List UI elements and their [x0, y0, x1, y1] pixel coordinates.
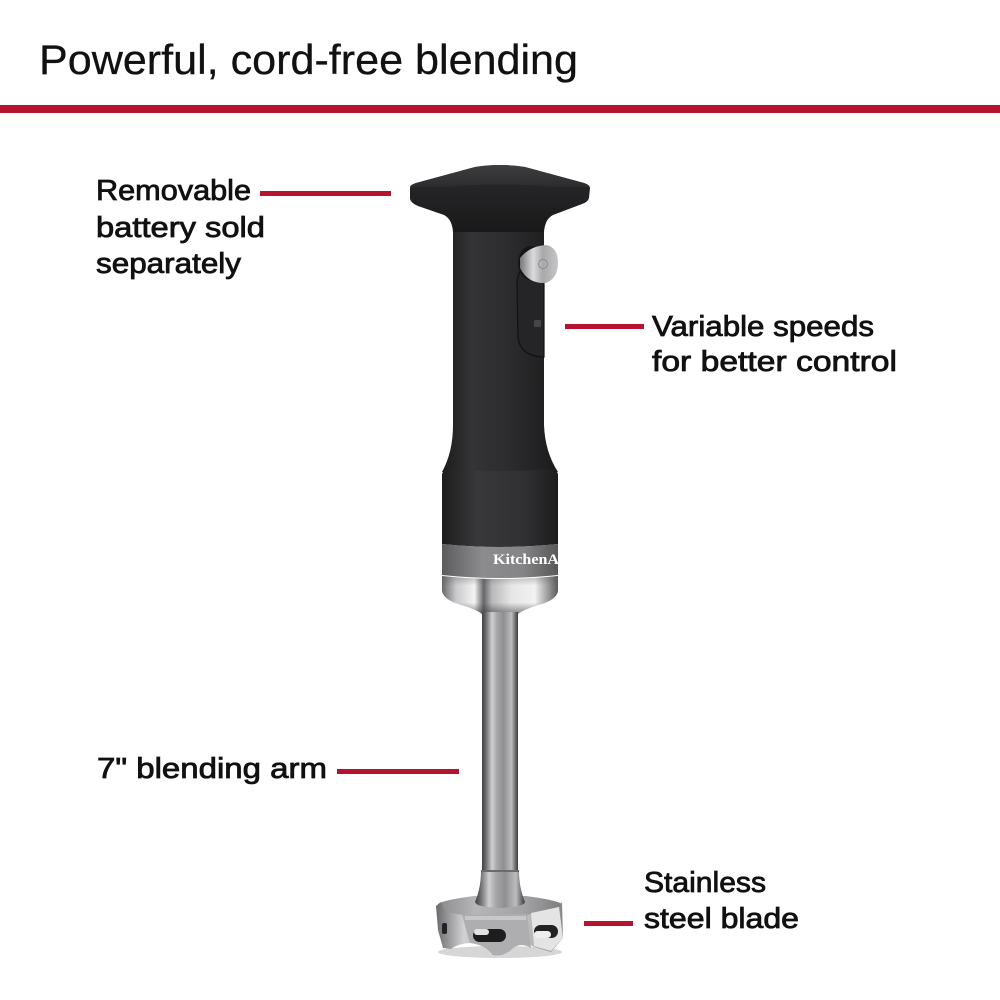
blender handle — [442, 210, 558, 472]
metal band with brand: KitchenA — [493, 552, 559, 568]
callout: stainless steel blade — [584, 867, 799, 935]
product: hand blender — [410, 165, 590, 958]
callout: stainless steel blade: Stainless — [644, 867, 766, 899]
blade guard — [436, 896, 563, 955]
callout: blending arm — [97, 753, 459, 785]
power button and lock slider — [517, 245, 558, 357]
callout: removable battery: battery sold — [96, 212, 265, 244]
motor collar — [442, 469, 558, 547]
metal band with brand — [442, 544, 559, 578]
callout: variable speeds: for better control — [652, 346, 897, 378]
callout: variable speeds: Variable speeds — [652, 311, 874, 343]
callout: stainless steel blade: steel blade — [644, 903, 799, 935]
blending arm — [482, 612, 518, 872]
blade shadow — [438, 946, 562, 958]
steel base — [442, 576, 558, 614]
callout: variable speeds — [565, 311, 897, 378]
callout: removable battery: Removable — [96, 175, 251, 207]
title: Powerful, cord-free blending — [39, 36, 578, 83]
blade neck — [475, 870, 525, 908]
callout: removable battery: separately — [96, 248, 242, 280]
blender cap — [410, 165, 590, 232]
callout: removable battery — [96, 175, 391, 280]
callout: blending arm: 7" blending arm — [97, 753, 327, 785]
header rule — [0, 105, 1000, 113]
